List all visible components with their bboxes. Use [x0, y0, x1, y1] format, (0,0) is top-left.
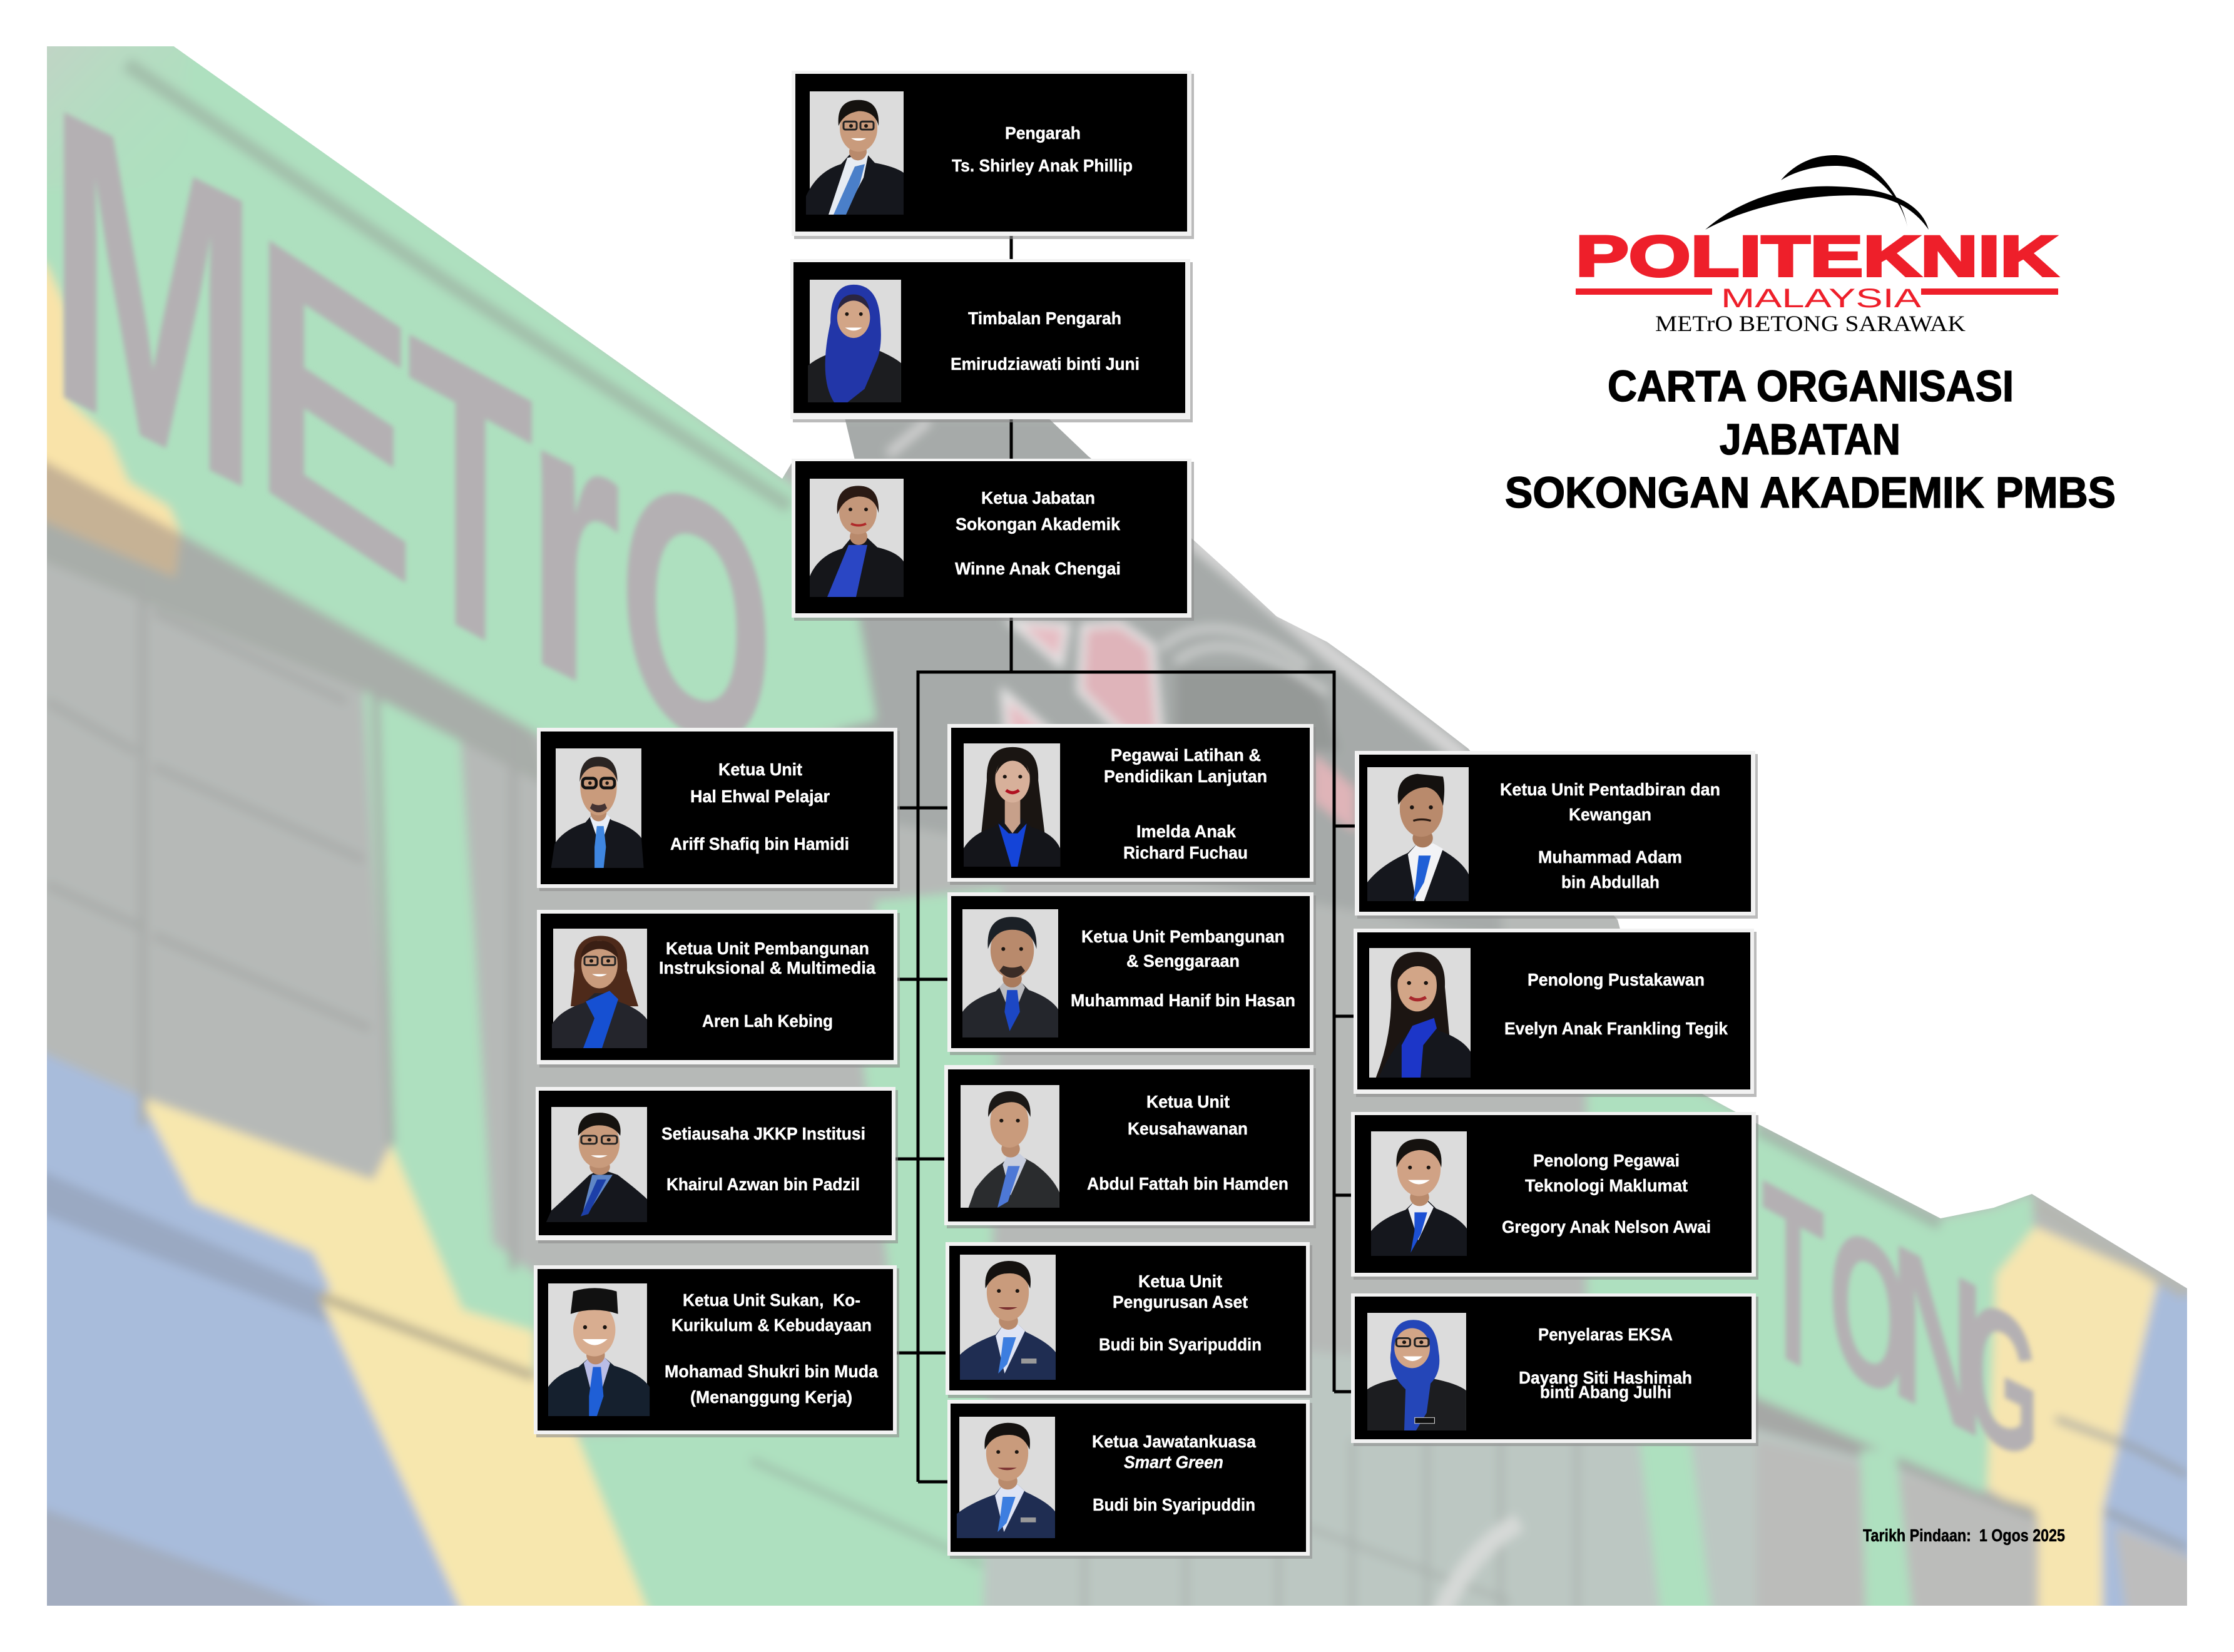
background sign lettering: METrO: O: [619, 396, 774, 837]
text: Sukan Ko-Kurikulum: Kurikulum & Kebudayaan: [671, 1315, 872, 1335]
card: Penyelaras EKSA: [1351, 1293, 1758, 1446]
text: Penolong Pustakawan: [1504, 970, 1728, 1038]
text: Teknologi Maklumat: Gregory Anak Nelson Awai: [1502, 1217, 1711, 1236]
card: Penolong Pustakawan: [1354, 929, 1757, 1097]
text: Pembangunan Instruksional: Ketua Unit Pembangunan: [666, 939, 869, 958]
text: Pembangunan Instruksional: Aren Lah Kebing: [702, 1011, 833, 1031]
text: Setiausaha JKKP: Setiausaha JKKP Institusi: [661, 1124, 865, 1143]
text: Pengarah: Ts. Shirley Anak Phillip: [952, 156, 1133, 175]
photo: Shirley: [806, 91, 904, 215]
background sign lettering: METrO: E: [253, 151, 415, 668]
text: Setiausaha JKKP: [661, 1124, 865, 1194]
text: Pembangunan Instruksional: [659, 939, 875, 1031]
text: Teknologi Maklumat: [1502, 1151, 1711, 1236]
text: Setiausaha JKKP: Khairul Azwan bin Padzil: [666, 1175, 860, 1194]
text: Pengurusan Aset: Budi bin Syaripuddin: [1099, 1335, 1262, 1354]
text: Hal Ehwal Pelajar: Ketua Unit: [718, 760, 802, 779]
photo: Shukri: [548, 1283, 650, 1416]
text: Penyelaras EKSA: binti Abang Julhi: [1540, 1382, 1671, 1402]
photo: Khairul: [546, 1107, 647, 1222]
connector lines: [895, 236, 1358, 1482]
photo: Dayang: [1367, 1313, 1466, 1430]
text: Pengurusan Aset: Pengurusan Aset: [1113, 1292, 1248, 1312]
text: Hal Ehwal Pelajar: Ariff Shafiq bin Hamidi: [670, 834, 849, 854]
logo bars: [1576, 288, 2058, 295]
text: Smart Green: Budi bin Syaripuddin: [1093, 1495, 1255, 1514]
text: Pembangunan dan Senggaraan: Ketua Unit Pembangunan: [1081, 927, 1285, 946]
text: Pengurusan Aset: [1099, 1272, 1262, 1354]
text: Penyelaras EKSA: [1519, 1325, 1692, 1402]
text: Latihan dan Pendidikan Lanjutan: [1104, 745, 1267, 862]
photo: Winne: [810, 479, 904, 597]
background sign lettering: METrO: r: [524, 289, 622, 790]
photo: Imelda: [964, 743, 1060, 867]
text: Keusahawanan: Keusahawanan: [1128, 1119, 1248, 1138]
text: Latihan dan Pendidikan Lanjutan: Pendidikan Lanjutan: [1104, 767, 1267, 786]
text: Hal Ehwal Pelajar: [670, 760, 849, 854]
photo: Emirudziawati: [808, 280, 901, 402]
card: Latihan dan Pendidikan Lanjutan: [947, 724, 1316, 885]
text: Sukan Ko-Kurikulum: [665, 1290, 878, 1407]
text: Keusahawanan: Abdul Fattah bin Hamden: [1087, 1174, 1288, 1193]
text: Penyelaras EKSA: Penyelaras EKSA: [1538, 1325, 1673, 1344]
photo: Gregory: [1371, 1131, 1467, 1256]
title: [1505, 362, 2116, 517]
text: Pentadbiran dan Kewangan: Ketua Unit Pentadbiran dan: [1500, 780, 1720, 799]
background sign lettering: METrO: M: [47, 14, 259, 583]
photo: Aren: [552, 929, 647, 1048]
photo: Evelyn: [1369, 948, 1471, 1078]
text: Keusahawanan: [1087, 1092, 1288, 1193]
text: Pengurusan Aset: Ketua Unit: [1138, 1272, 1222, 1291]
logo campus name: METrO BETONG SARAWAK: [1655, 311, 1966, 336]
revision date: Tarikh Pindaan: 1 Ogos 2025: [1863, 1526, 2065, 1545]
card: Pembangunan dan Senggaraan: [947, 892, 1316, 1055]
text: Smart Green: Smart Green: [1124, 1452, 1223, 1472]
card: Keusahawanan: [944, 1065, 1316, 1228]
card: Smart Green: [947, 1400, 1312, 1559]
text: Sukan Ko-Kurikulum: (Menanggung Kerja): [690, 1387, 852, 1407]
background sign lettering: BETONG: T: [1762, 1128, 1825, 1432]
text: Pembangunan dan Senggaraan: & Senggaraan: [1126, 951, 1240, 971]
text: Ketua Jabatan: Sokongan Akademik: [956, 514, 1120, 534]
text: Teknologi Maklumat: Teknologi Maklumat: [1525, 1176, 1688, 1195]
text: Timbalan Pengarah: Timbalan Pengarah: [968, 308, 1121, 328]
text: Pentadbiran dan Kewangan: Kewangan: [1569, 805, 1651, 824]
card: Pengarah: [792, 71, 1194, 239]
title: CARTA ORGANISASI: [1608, 362, 2014, 410]
card: Sukan Ko-Kurikulum: [534, 1265, 899, 1437]
text: Keusahawanan: Ketua Unit: [1146, 1092, 1230, 1111]
logo subtitle: MALAYSIA: [1721, 283, 1921, 314]
title: SOKONGAN AKADEMIK PMBS: [1505, 468, 2116, 517]
text: Penolong Pustakawan: Penolong Pustakawan: [1528, 970, 1705, 989]
background sign lettering: BETONG: O: [1829, 1176, 1909, 1448]
text: Pembangunan dan Senggaraan: Muhammad Hanif bin Hasan: [1071, 991, 1295, 1010]
background sign lettering: BETONG: N: [1890, 1194, 1985, 1487]
text: Hal Ehwal Pelajar: Hal Ehwal Pelajar: [690, 787, 830, 806]
logo wordmark: POLITEKNIK: [1576, 225, 2058, 288]
text: Penolong Pustakawan: Evelyn Anak Frankling Tegik: [1504, 1019, 1728, 1038]
text: Pengarah: Pengarah: [1005, 123, 1081, 143]
card: Timbalan Pengarah: [790, 259, 1193, 422]
text: Timbalan Pengarah: [951, 308, 1140, 374]
text: Pentadbiran dan Kewangan: Muhammad Adam: [1538, 847, 1682, 867]
text: Sukan Ko-Kurikulum: Mohamad Shukri bin Muda: [665, 1362, 878, 1381]
logo: Politeknik Malaysia Metro Betong Sarawak: [1576, 155, 2058, 336]
background sign lettering: METrO: [47, 14, 774, 837]
card: Setiausaha JKKP: [536, 1087, 898, 1243]
photo: Hanif: [962, 909, 1058, 1038]
text: Ketua Jabatan: Winne Anak Chengai: [955, 559, 1121, 578]
photo: Fattah: [961, 1085, 1059, 1208]
card: Hal Ehwal Pelajar: [537, 728, 900, 891]
text: Pengarah: [952, 123, 1133, 175]
photo: Budi: [957, 1417, 1055, 1538]
text: Latihan dan Pendidikan Lanjutan: Imelda Anak: [1136, 822, 1236, 841]
text: Pentadbiran dan Kewangan: bin Abdullah: [1561, 872, 1660, 892]
text: Smart Green: [1092, 1432, 1256, 1514]
text: Latihan dan Pendidikan Lanjutan: Pegawai Latihan &: [1111, 745, 1261, 765]
background sign lettering: BETONG: G: [1965, 1253, 2039, 1506]
card: Teknologi Maklumat: [1351, 1112, 1758, 1280]
card: Pengurusan Aset: [946, 1242, 1312, 1398]
text: Smart Green: Ketua Jawatankuasa: [1092, 1432, 1256, 1451]
background sign lettering: BETONG: [1762, 1128, 2039, 1506]
text: Pembangunan Instruksional: Instruksional & Multimedia: [659, 958, 875, 977]
text: Pentadbiran dan Kewangan: [1500, 780, 1720, 892]
text: Pembangunan dan Senggaraan: [1071, 927, 1295, 1010]
title: JABATAN: [1720, 415, 1900, 464]
card: Pembangunan Instruksional: [537, 910, 900, 1068]
text: Sukan Ko-Kurikulum: Ketua Unit Sukan, Ko-: [683, 1290, 860, 1310]
photo: Ariff: [551, 748, 644, 868]
background sign lettering: METrO: T: [407, 250, 534, 750]
photo: Budi: [960, 1255, 1056, 1380]
text: Timbalan Pengarah: Emirudziawati binti Juni: [951, 354, 1140, 374]
photo: Adam: [1367, 767, 1469, 901]
text: Ketua Jabatan: [955, 488, 1121, 578]
text: Penyelaras EKSA: Dayang Siti Hashimah: [1519, 1368, 1692, 1387]
card: Ketua Jabatan: [792, 459, 1194, 621]
text: Ketua Jabatan: Ketua Jabatan: [981, 488, 1095, 507]
logo swoosh: [1705, 155, 1929, 230]
card: Pentadbiran dan Kewangan: [1355, 751, 1758, 919]
text: Latihan dan Pendidikan Lanjutan: Richard Fuchau: [1123, 843, 1248, 862]
text: Teknologi Maklumat: Penolong Pegawai: [1533, 1151, 1680, 1170]
